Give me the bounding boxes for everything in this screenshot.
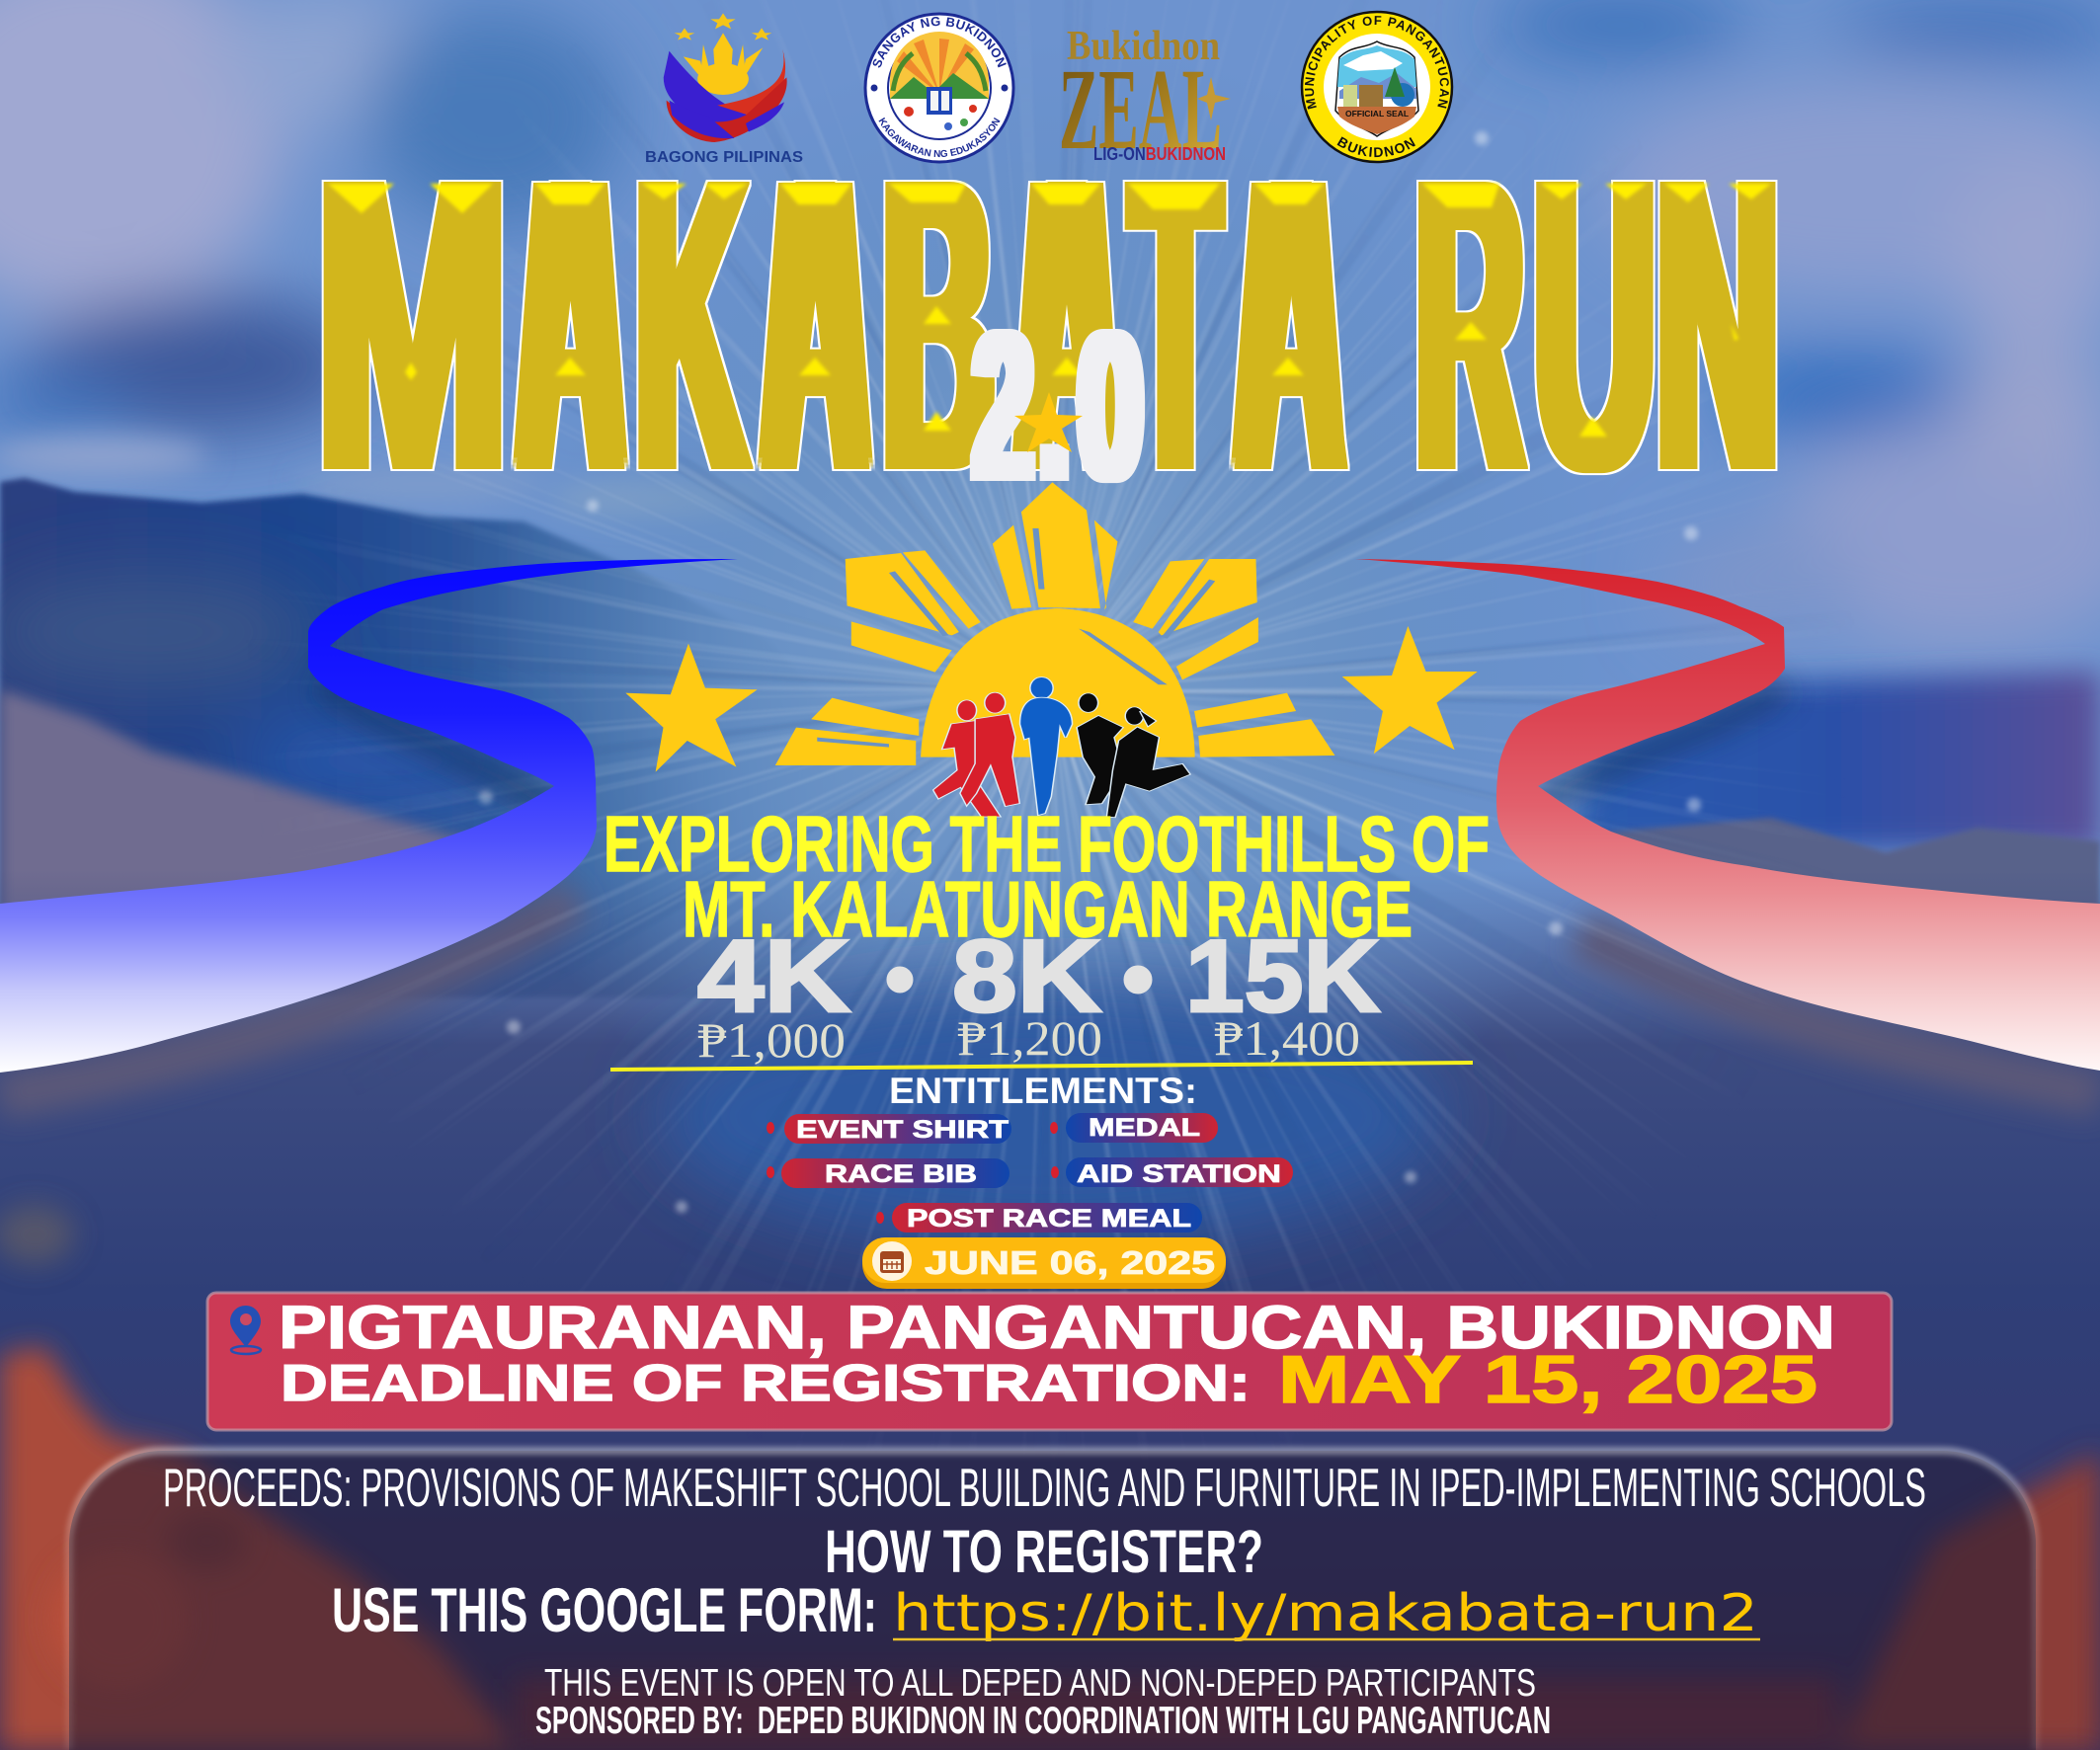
philippine sun emblem with stars (625, 482, 1478, 772)
race prices: ₱1,200 (957, 1010, 1102, 1066)
right star (1342, 626, 1478, 754)
pill: race bib (781, 1158, 1010, 1188)
title: MAKABATA RUN: R (1416, 94, 1523, 557)
logo: Bukidnon ZEAL (1059, 24, 1231, 174)
open to all note: THIS EVENT IS OPEN TO ALL DEPED AND NON-DEPED PARTICIPANTS (544, 1662, 1536, 1705)
logo: Municipality of Pangantucan seal: BUKIDNON (1337, 136, 1415, 158)
subtitle mark: 2.0 with star: 2 (973, 288, 1033, 522)
logo: Bukidnon ZEAL: ZEAL (1059, 44, 1222, 174)
registration link: https://bit.ly/makabata-run2 (893, 1584, 1758, 1643)
tagline: exploring the foothills: MT. KALATUNGAN RANGE (683, 865, 1413, 953)
pill: aid station (1066, 1157, 1293, 1188)
icon: calendar (872, 1241, 912, 1281)
logo: Municipality of Pangantucan seal: MUNICIPALITY OF PANGANTUCAN (1304, 16, 1449, 110)
sponsors note: SPONSORED BY: DEPED BUKIDNON IN COORDINATION WITH LGU PANGANTUCAN (535, 1700, 1551, 1742)
logo: Sangay ng Bukidnon seal (863, 12, 1015, 164)
date badge (862, 1237, 1226, 1289)
logo: Bukidnon ZEAL: Bukidnon (1067, 24, 1220, 69)
red runners (933, 693, 1018, 817)
title: MAKABATA RUN: A (521, 94, 620, 557)
logo: Municipality of Pangantucan seal: OFFICIAL SEAL (1345, 109, 1409, 119)
sparkle dots (479, 131, 1701, 1213)
subtitle mark: 2.0 with star (973, 288, 1143, 522)
red winding road (1355, 559, 2100, 1071)
sun disc (921, 608, 1195, 757)
subtitle mark: 2.0 with star: . (1039, 288, 1070, 522)
tagline: exploring the foothills: EXPLORING THE FOOTHILLS OF (604, 800, 1490, 888)
pill: post race meal (892, 1203, 1202, 1233)
title: MAKABATA RUN: U (1534, 94, 1656, 557)
title: MAKABATA RUN: A (1239, 94, 1341, 557)
title: MAKABATA RUN: A (766, 94, 865, 557)
pill: event shirt: EVENT SHIRT (796, 1116, 1009, 1144)
race prices (697, 1010, 1360, 1068)
subtitle mark: 2.0 with star: 0 (1078, 288, 1143, 522)
runners silhouettes (933, 677, 1189, 817)
black runners (1078, 693, 1189, 817)
sunburst light rays (458, 99, 1644, 1284)
how to register heading: HOW TO REGISTER? (825, 1518, 1263, 1585)
location and deadline banner (207, 1293, 1892, 1430)
logo: Bagong Pilipinas: BAGONG PILIPINAS (645, 149, 803, 166)
icon: location pin (230, 1306, 261, 1354)
entitlements heading: ENTITLEMENTS: (889, 1071, 1197, 1111)
blue runner (1020, 677, 1072, 815)
pill: event shirt (784, 1114, 1011, 1144)
google form label: USE THIS GOOGLE FORM: (332, 1576, 877, 1645)
pill: medal (1066, 1113, 1218, 1143)
logo: Bagong Pilipinas (645, 13, 803, 166)
race distances: 4K (697, 919, 850, 1034)
location and deadline banner: MAY 15, 2025 (1278, 1342, 1817, 1417)
information panel (69, 1451, 2036, 1750)
title: MAKABATA RUN: M (316, 94, 509, 557)
location and deadline banner: DEADLINE OF REGISTRATION: (281, 1355, 1251, 1412)
date badge: JUNE 06, 2025 (925, 1244, 1215, 1281)
icon: gold star (1014, 392, 1083, 452)
race distances: 15K (1185, 919, 1380, 1034)
logo: Sangay ng Bukidnon seal: SANGAY NG BUKIDNON (873, 17, 1007, 67)
entitlements list (767, 1113, 1293, 1233)
title: MAKABATA RUN (316, 94, 1779, 557)
title: MAKABATA RUN: A (1019, 94, 1114, 557)
road shadows (321, 681, 1783, 815)
sun rays (775, 482, 1334, 765)
logos row (645, 10, 1454, 174)
logo: Municipality of Pangantucan seal (1300, 10, 1454, 164)
title: MAKABATA RUN: T (1131, 94, 1220, 557)
location and deadline banner: PIGTAURANAN, PANGANTUCAN, BUKIDNON (279, 1294, 1835, 1361)
race distances (697, 919, 1380, 1034)
logo: Bukidnon ZEAL: LIG-ONBUKIDNON (1093, 144, 1226, 164)
race distances: 8K (952, 919, 1101, 1034)
text: N (1656, 94, 1779, 557)
race prices: ₱1,000 (697, 1012, 846, 1068)
pill: post race meal: POST RACE MEAL (907, 1205, 1191, 1233)
race prices: ₱1,400 (1214, 1010, 1360, 1066)
pill: medal: MEDAL (1089, 1114, 1200, 1142)
pill: race bib: RACE BIB (825, 1160, 977, 1188)
pill: aid station: AID STATION (1077, 1160, 1281, 1188)
blue winding road (0, 559, 738, 1073)
tagline: exploring the foothills (604, 800, 1490, 953)
title: MAKABATA RUN: K (636, 94, 747, 557)
left star (625, 644, 758, 772)
logo: Sangay ng Bukidnon seal: KAGAWARAN NG EDUKASYON (879, 117, 1000, 158)
title: MAKABATA RUN: B (883, 94, 994, 557)
